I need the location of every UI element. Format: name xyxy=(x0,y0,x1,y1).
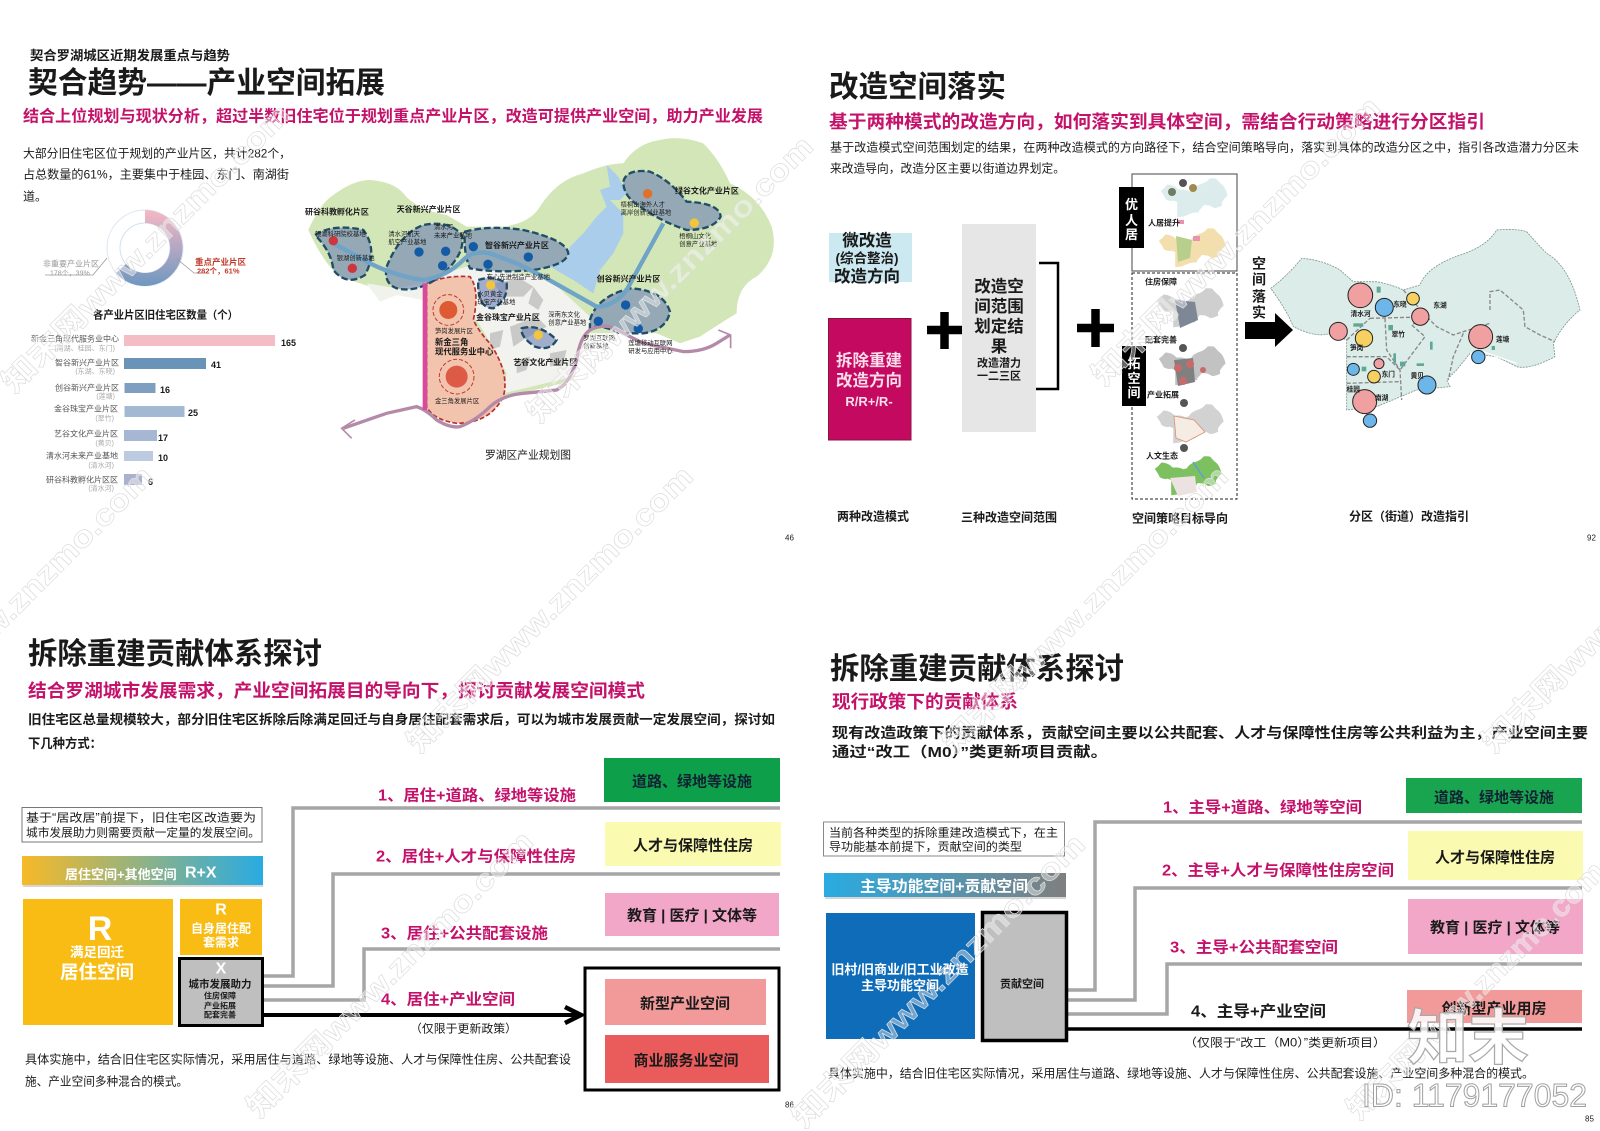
map: district guidance: 东湖 xyxy=(1433,300,1447,309)
map: district guidance: 莲塘 xyxy=(1496,334,1510,343)
box: talent housing xyxy=(605,822,781,866)
intro paragraph: 基于改造模式空间范围划定的结果，在两种改造模式的方向路径下，结合空间策略导向，落实到具体的改造分区之中，指引各改造潜力分区未 xyxy=(830,140,1579,154)
column captions: 两种改造模式 xyxy=(837,508,909,524)
map: Luohu industrial plan: 梧桐山文化 xyxy=(679,231,712,240)
block: X city contribution xyxy=(180,958,262,1026)
box: talent housing xyxy=(1408,831,1583,880)
column captions: 三种改造空间范围 xyxy=(961,510,1057,524)
box: education xyxy=(1408,899,1583,954)
watermarks: 知末网www.znzmo.com xyxy=(401,460,700,759)
restriction note: （仅限于“改工（M0）”类更新项目） xyxy=(1184,1036,1386,1050)
map: Luohu industrial plan: 水贝黄金 xyxy=(477,289,503,298)
box: roads and green xyxy=(604,758,780,802)
route labels: 1、主导+道路、绿地等空间 xyxy=(1163,798,1362,816)
map: Luohu industrial plan: 笋岗发展片区 xyxy=(435,326,474,335)
block: R own facilities: 套需求 xyxy=(203,934,239,950)
box: talent housing: 人才与保障性住房 xyxy=(1435,848,1555,866)
box: education: 教育 | 医疗 | 文体等 xyxy=(627,906,757,924)
map: Luohu industrial plan: 金谷珠宝产业片区 xyxy=(476,312,540,322)
map: Luohu industrial plan: 莲塘移动互联网 xyxy=(628,338,673,347)
bar chart: residential areas by zone: 新金三角现代服务业中心 xyxy=(31,334,119,344)
donut chart: 非重要产业片区 xyxy=(43,258,99,268)
map: Luohu industrial plan: 新金三角 xyxy=(435,337,468,347)
box: roads and green: 道路、绿地等设施 xyxy=(1434,788,1554,806)
box: micro renovation xyxy=(829,231,912,286)
bar chart: residential areas by zone: 金谷珠宝产业片区 xyxy=(54,404,118,414)
bar chart: residential areas by zone: 清水河未来产业基地 xyxy=(46,450,118,460)
watermarks: 知末网www.znzmo.com xyxy=(521,130,820,429)
block: R own facilities xyxy=(180,899,262,955)
block: contribution space: 贡献空间 xyxy=(1000,976,1044,990)
bar chart: residential areas by zone: (莲塘) xyxy=(96,392,115,400)
box: demolition and rebuilding: 拆除重建 xyxy=(836,350,902,370)
map: district guidance: 黄贝 xyxy=(1411,371,1424,380)
map: Luohu industrial plan: 创新基地 xyxy=(583,341,609,350)
block: main function: 旧村/旧商业/旧工业改造 xyxy=(831,962,969,977)
note box xyxy=(22,808,262,842)
box: renovation scope: 一二三区 xyxy=(977,370,1021,382)
bar chart: residential areas by zone: 创谷新兴产业片区 xyxy=(55,382,119,392)
route labels: 4、居住+产业空间 xyxy=(381,990,515,1008)
box: renovation scope: 果 xyxy=(991,338,1008,356)
block: X city contribution: 配套完善 xyxy=(204,1010,236,1020)
arrow: spatial implementation: 实 xyxy=(1252,304,1266,320)
route labels: 4、主导+产业空间 xyxy=(1191,1002,1326,1020)
note box: 导功能基本前提下，贡献空间的类型 xyxy=(829,840,1022,854)
box: education: 教育 | 医疗 | 文体等 xyxy=(1430,918,1560,936)
gradient bar: R+X: 居住空间+其他空间 xyxy=(65,867,177,882)
box: industrial group xyxy=(585,968,779,1090)
bar chart: residential areas by zone: 16 xyxy=(160,385,170,395)
map: Luohu industrial plan: 未来产业基地 xyxy=(434,230,473,239)
strategy group: expand space xyxy=(1122,273,1237,499)
map: Luohu industrial plan: 研谷科教孵化片区 xyxy=(305,206,369,216)
bar chart: residential areas by zone: (南湖、桂园、东门) xyxy=(54,344,115,352)
map caption: 罗湖区产业规划图 xyxy=(485,448,571,462)
donut chart: 重点产业片区 xyxy=(195,257,247,267)
intro paragraph: 来改造导向，改造分区主要以街道边界划定。 xyxy=(830,160,1065,176)
gradient bar: R+X: R+X xyxy=(185,864,217,882)
page number: 85 xyxy=(1585,1114,1594,1124)
connector lines xyxy=(1067,822,1582,1029)
column captions: 空间策略目标导向 xyxy=(1132,510,1228,526)
section subtitle: 契合罗湖城区近期发展重点与趋势 xyxy=(30,48,230,63)
arrow: spatial implementation: 落 xyxy=(1252,288,1266,304)
block: main function: 主导功能空间 xyxy=(861,978,939,993)
panel: spatial implementation xyxy=(828,71,1596,542)
bar chart: residential areas by zone: 艺谷文化产业片区 xyxy=(54,428,118,438)
intro paragraph xyxy=(23,146,291,204)
map: district guidance xyxy=(1271,229,1580,427)
closing paragraph: 具体实施中，结合旧住宅区实际情况，采用居住与道路、绿地等设施、人才与保障性住房、公共配套设施、产业空间多种混合的模式。 xyxy=(828,1066,1534,1080)
intro paragraph: 现有改造政策下的贡献体系，贡献空间主要以公共配套、人才与保障性住房等公共利益为主，产业空间主要 xyxy=(832,724,1588,742)
bar chart: residential areas by zone: 25 xyxy=(188,408,198,418)
magenta heading: 结合上位规划与现状分析，超过半数旧住宅位于规划重点产业片区，改造可提供产业空间，助力产业发展 xyxy=(23,106,763,126)
bar chart: residential areas by zone: 6 xyxy=(148,477,153,487)
intro paragraph xyxy=(28,712,775,751)
logo watermark: ID: 1179177052 xyxy=(1362,1078,1587,1114)
page number: 86 xyxy=(785,1100,794,1110)
block: X city contribution: X xyxy=(216,960,227,978)
route labels: 2、居住+人才与保障性住房 xyxy=(376,846,576,866)
map: Luohu industrial plan: 离岸创新创业基地 xyxy=(621,207,672,216)
map: Luohu industrial plan: 金三角发展片区 xyxy=(435,396,480,405)
bar chart: residential areas by zone: 智谷新兴产业片区 xyxy=(55,358,119,368)
bar chart: residential areas by zone: 41 xyxy=(211,360,221,370)
column captions xyxy=(837,508,1469,526)
map: Luohu industrial plan: 航空产业基地 xyxy=(388,237,427,246)
map: Luohu industrial plan: 研发与应用中心 xyxy=(628,346,673,355)
magenta heading: 结合罗湖城市发展需求，产业空间拓展目的导向下，探讨贡献发展空间模式 xyxy=(28,680,645,701)
map: Luohu industrial plan xyxy=(305,138,774,438)
route labels: 2、主导+人才与保障性住房空间 xyxy=(1162,860,1394,880)
box: renovation scope: 间范围 xyxy=(974,297,1024,316)
bar chart: residential areas by zone: (翠竹) xyxy=(95,414,114,422)
map: district guidance: 清水河 xyxy=(1351,309,1371,318)
strategy group: expand space: 住房保障 xyxy=(1145,276,1177,286)
box: demolition and rebuilding: R/R+/R- xyxy=(845,394,893,409)
donut chart xyxy=(43,210,247,286)
block: X city contribution: 城市发展助力 xyxy=(188,978,252,990)
donut chart: 178个，39% xyxy=(50,270,90,278)
map: Luohu industrial plan: 创意产业基地 xyxy=(679,239,718,248)
map: Luohu industrial plan: 天谷新兴产业片区 xyxy=(397,204,461,214)
block: main function xyxy=(826,913,975,1039)
box: talent housing: 人才与保障性住房 xyxy=(633,836,753,854)
box: renovation scope: 改造潜力 xyxy=(977,356,1021,370)
strategy group: expand space: 人文生态 xyxy=(1146,450,1178,460)
map: district guidance: 东晓 xyxy=(1393,299,1407,308)
note box: 城市发展助力则需要贡献一定量的发展空间。 xyxy=(26,826,260,840)
bar chart: residential areas by zone xyxy=(31,308,296,492)
map: Luohu industrial plan: 绿谷文化产业片区 xyxy=(675,185,739,195)
map: Luohu industrial plan: 深南东文化 xyxy=(548,309,581,318)
magenta heading: 现行政策下的贡献体系 xyxy=(832,691,1018,712)
title: 拆除重建贡献体系探讨 xyxy=(830,653,1124,686)
closing paragraph: 施、产业空间多种混合的模式。 xyxy=(25,1074,188,1088)
watermarks: 知末网www.znzmo.com xyxy=(786,828,1092,1131)
gradient bar: R+X xyxy=(22,856,263,887)
watermarks: 知末网www.znzmo.com xyxy=(936,460,1235,759)
map: Luohu industrial plan: 清水河 xyxy=(434,222,454,231)
arrow head xyxy=(565,1007,581,1023)
block: X city contribution: 住房保障 xyxy=(204,990,236,1000)
route labels: 3、居住+公共配套设施 xyxy=(381,924,549,942)
block: R own facilities: R xyxy=(215,902,227,918)
map: Luohu industrial plan: 艺谷文化产业片区 xyxy=(513,357,577,367)
magenta heading: 基于两种模式的改造方向，如何落实到具体空间，需结合行动策略进行分区指引 xyxy=(829,111,1485,132)
strategy group: better living: 优 xyxy=(1125,197,1138,212)
bar chart: residential areas by zone: 165 xyxy=(281,338,296,348)
block: contribution space xyxy=(982,912,1066,1040)
box: industrial group: 商业服务业空间 xyxy=(633,1052,739,1070)
map: district guidance: 笋岗 xyxy=(1350,343,1364,352)
bracket xyxy=(1036,263,1058,389)
bar chart: residential areas by zone: 各产业片区旧住宅区数量（个） xyxy=(93,308,238,322)
box: roads and green: 道路、绿地等设施 xyxy=(632,772,752,790)
block: R resettlement housing xyxy=(23,899,173,1025)
panel: current policy contribution xyxy=(824,653,1594,1124)
box: renovation scope: 改造空 xyxy=(974,276,1024,296)
logo watermark: 知末 xyxy=(1407,1005,1529,1072)
arrow: spatial implementation: 间 xyxy=(1252,272,1266,288)
route labels: 1、居住+道路、绿地等设施 xyxy=(378,786,577,804)
donut chart: 282个，61% xyxy=(197,266,240,276)
map: district guidance: 东门 xyxy=(1382,369,1395,378)
box: micro renovation: (综合整治) xyxy=(836,250,898,266)
box: demolition and rebuilding: 改造方向 xyxy=(836,370,902,390)
box: renovation scope: 划定结 xyxy=(974,316,1024,336)
block: X city contribution: 产业拓展 xyxy=(204,1000,236,1010)
plus sign xyxy=(927,312,962,349)
map: Luohu industrial plan: 银湖创新基地 xyxy=(337,253,375,262)
gradient bar xyxy=(824,873,1066,899)
watermarks: 知末网www.znzmo.com xyxy=(1086,91,1387,392)
intro paragraph xyxy=(832,724,1588,761)
title: 契合趋势——产业空间拓展 xyxy=(28,67,385,100)
intro paragraph: 通过“改工（M0）”类更新项目贡献。 xyxy=(832,743,1108,761)
strategy group: better living: 居 xyxy=(1125,227,1138,242)
bar chart: residential areas by zone: 10 xyxy=(158,453,168,463)
strategy group: expand space: 产业拓展 xyxy=(1147,390,1179,400)
bar chart: residential areas by zone: 研谷科教孵化片区区 xyxy=(46,474,118,484)
closing paragraph xyxy=(25,1052,571,1088)
note box xyxy=(824,822,1064,856)
connector lines xyxy=(264,808,780,1015)
block: R resettlement housing: R xyxy=(88,910,112,948)
map: Luohu industrial plan: 现代服务业中心 xyxy=(435,347,494,357)
intro paragraph: 道。 xyxy=(23,190,47,204)
intro paragraph: 旧住宅区总量规模较大，部分旧住宅区拆除后除满足回迁与自身居住配套需求后，可以为城市发展贡献一定发展空间，探讨如 xyxy=(28,712,775,727)
intro paragraph: 下几种方式： xyxy=(28,736,102,751)
strategy group: better living xyxy=(1119,174,1237,271)
block: R resettlement housing: 居住空间 xyxy=(60,962,134,982)
box: micro renovation: 微改造 xyxy=(842,231,892,250)
watermarks: 知末网www.znzmo.com xyxy=(0,98,297,399)
arrow: spatial implementation: 空 xyxy=(1252,256,1266,272)
bar chart: residential areas by zone: (东湖、东晓) xyxy=(75,366,115,376)
column captions: 分区（街道）改造指引 xyxy=(1349,508,1469,524)
map: Luohu industrial plan: 珠宝产业基地 xyxy=(477,297,516,306)
map: Luohu industrial plan: 创谷新兴产业片区 xyxy=(597,273,661,283)
box: innovative industrial xyxy=(1407,990,1582,1023)
note box: 基于“居改居”前提下，旧住宅区改造要为 xyxy=(26,810,256,824)
map: district guidance: 南湖 xyxy=(1375,393,1389,402)
note box: 当前各种类型的拆除重建改造模式下，在主 xyxy=(829,826,1058,840)
restriction note: （仅限于更新政策） xyxy=(410,1022,517,1036)
strategy group: expand space: 间 xyxy=(1127,385,1141,400)
arrow: spatial implementation xyxy=(1245,256,1293,347)
page number: 92 xyxy=(1587,534,1596,542)
route labels: 3、主导+公共配套空间 xyxy=(1170,938,1338,956)
bar chart: residential areas by zone: 17 xyxy=(158,433,168,443)
route labels xyxy=(376,786,577,1008)
map: Luohu industrial plan: 梧桐山海外人才 xyxy=(621,199,665,208)
panel: industrial space expansion xyxy=(23,48,794,542)
intro paragraph: 大部分旧住宅区位于规划的产业片区，共计282个， xyxy=(23,146,291,160)
strategy group: expand space: 拓 xyxy=(1127,356,1141,371)
strategy group: expand space: 空 xyxy=(1127,371,1141,386)
watermarks: 知末网www.znzmo.com xyxy=(1341,855,1600,1126)
bar chart: residential areas by zone: (清水河) xyxy=(88,460,114,470)
box: renovation scope xyxy=(962,224,1036,432)
box: innovative industrial: 创新型产业用房 xyxy=(1441,1000,1547,1018)
map: Luohu industrial plan: 清水河航天 xyxy=(388,229,421,238)
box: education xyxy=(605,893,779,936)
bar chart: residential areas by zone: (清水河) xyxy=(88,484,114,492)
intro paragraph: 占总数量的61%，主要集中于桂园、东门、南湖街 xyxy=(23,166,289,182)
panel: contribution system exploration xyxy=(22,638,794,1110)
block: R own facilities: 自身居住配 xyxy=(191,920,251,936)
logo watermark xyxy=(1362,1005,1587,1114)
bar chart: residential areas by zone: (黄贝) xyxy=(95,438,114,448)
route labels xyxy=(1162,798,1394,1020)
box: industrial group: 新型产业空间 xyxy=(640,994,730,1012)
map: district guidance: 桂园 xyxy=(1347,384,1360,393)
strategy group: better living: 人居提升 xyxy=(1148,218,1180,228)
watermarks: 知末网www.znzmo.com xyxy=(241,825,540,1124)
strategy group: better living: 人 xyxy=(1125,213,1138,228)
map: Luohu industrial plan: 银湖科研院校基地 xyxy=(315,229,366,238)
title: 拆除重建贡献体系探讨 xyxy=(28,638,322,671)
box: demolition and rebuilding xyxy=(828,318,911,440)
intro paragraph xyxy=(830,140,1579,176)
map: Luohu industrial plan: 布心先进制造产业基地 xyxy=(487,272,551,281)
block: R resettlement housing: 满足回迁 xyxy=(70,944,124,960)
map: Luohu industrial plan: 智谷新兴产业片区 xyxy=(485,240,549,250)
page number: 46 xyxy=(785,534,794,542)
map: district guidance: 翠竹 xyxy=(1392,329,1405,338)
box: roads and green xyxy=(1406,778,1582,813)
map: Luohu industrial plan: 创意产业基地 xyxy=(548,317,587,326)
title: 改造空间落实 xyxy=(829,71,1006,104)
box: micro renovation: 改造方向 xyxy=(834,266,900,286)
strategy group: expand space: 配套完善 xyxy=(1145,334,1177,344)
map: Luohu industrial plan: 罗湖互联网 xyxy=(583,333,615,342)
plus sign xyxy=(1077,309,1114,347)
closing paragraph: 具体实施中，结合旧住宅区实际情况，采用居住与道路、绿地等设施、人才与保障性住房、公共配套设 xyxy=(25,1052,571,1066)
gradient bar: 主导功能空间+贡献空间 xyxy=(860,876,1028,896)
